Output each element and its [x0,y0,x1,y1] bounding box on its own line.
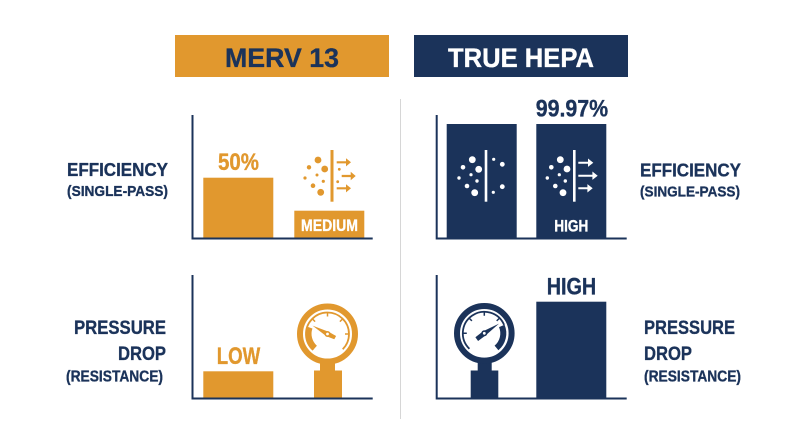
right label: efficiency: EFFICIENCY [640,160,741,180]
header: MERV 13 [175,35,389,77]
right label: pressure drop [644,317,741,386]
left label: pressure drop: PRESSURE [74,317,166,339]
right label: pressure drop: (RESISTANCE) [644,368,741,386]
panel: True HEPA efficiency chart [437,96,627,238]
header: MERV 13: MERV 13 [225,43,339,73]
icon: pressure gauge low [300,306,355,398]
right label: efficiency [640,160,741,200]
bar: high [536,124,606,238]
bar: high [536,302,606,398]
right label: pressure drop: PRESSURE [644,317,735,339]
bar: filter capture [447,124,517,238]
value: 99.97%: 99.97% [536,96,608,123]
bar: medium: MEDIUM [301,217,358,235]
icon: filter with particles passing [303,150,356,202]
icon: pressure gauge high [457,306,512,398]
left label: efficiency: EFFICIENCY [67,159,168,180]
header: TRUE HEPA [414,35,628,77]
icon: filter with arrows [546,150,598,202]
left label: efficiency: (SINGLE-PASS) [67,183,168,200]
left label: pressure drop: (RESISTANCE) [66,368,163,386]
bar: 50% [203,178,273,238]
left label: pressure drop [66,317,166,386]
panel: True HEPA pressure drop chart [437,273,627,398]
right label: pressure drop: DROP [644,343,692,365]
panel: MERV 13 pressure drop chart [192,275,373,398]
right label: efficiency: (SINGLE-PASS) [640,184,740,200]
bar: high: HIGH [554,218,588,236]
left label: pressure drop: DROP [118,343,166,365]
left label: efficiency [67,159,168,200]
value: 50%: 50% [218,149,259,176]
header: TRUE HEPA: TRUE HEPA [448,43,594,73]
value: high: HIGH [547,273,596,300]
panel: MERV 13 efficiency chart [192,115,373,238]
icon: particles blocked by filter [457,150,505,202]
value: low: LOW [217,343,260,370]
bar: medium [294,211,364,238]
bar: low [203,371,273,398]
